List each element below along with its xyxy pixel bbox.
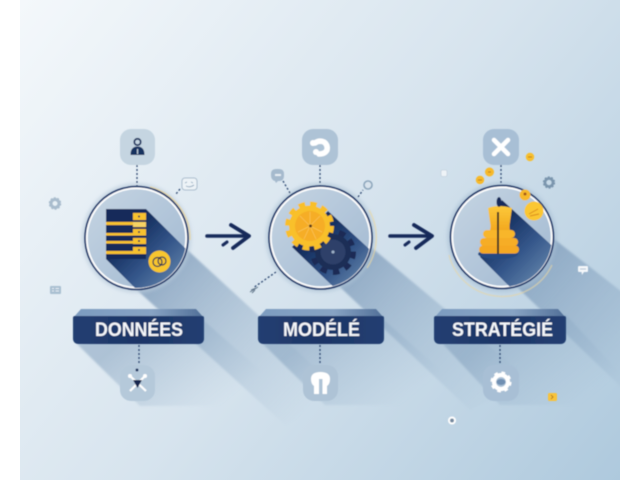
bottom icon: network <box>120 365 155 401</box>
top icon: cloud loop <box>302 129 338 165</box>
icon: gold coin <box>148 250 170 272</box>
icon: dark gear <box>313 232 353 272</box>
icon shadow: server <box>106 208 186 289</box>
top icon: cross <box>483 129 519 165</box>
small icon: pencil <box>250 287 258 293</box>
label: stratégie: STRATÉGIÉ <box>452 319 553 341</box>
panel: données circle <box>80 182 192 294</box>
label: données <box>73 309 204 344</box>
connector lines <box>137 165 501 367</box>
top icon: person <box>120 129 155 165</box>
bottom icon: arch <box>303 365 338 401</box>
small icon: magnifier <box>364 181 372 189</box>
small icon: left gear <box>50 198 60 209</box>
label: données: DONNÉES <box>95 319 183 341</box>
icon: strategy piece <box>478 197 519 259</box>
small icon: white ring <box>449 418 455 424</box>
panel: stratégie circle <box>446 182 557 298</box>
label: stratégie <box>434 309 566 344</box>
icon shadow: gears <box>292 210 370 287</box>
small icon: left card <box>50 286 61 294</box>
small icon: white chat <box>578 266 588 275</box>
icon: gold badge small <box>520 190 530 200</box>
small icon: blue gear <box>544 177 554 188</box>
arrow 2 <box>390 225 432 248</box>
small icon: gold note <box>548 393 557 401</box>
label: modèle: MODÉLÉ <box>283 319 360 341</box>
small icon: smile bubble <box>182 178 197 190</box>
arrow 1 <box>207 225 249 248</box>
icon: gold badge large <box>524 202 544 220</box>
icon: server rack <box>106 209 146 259</box>
small icon: chat bubble grey <box>271 169 284 183</box>
small icons: gold coins <box>476 153 534 184</box>
long shadows <box>77 240 620 406</box>
bottom icon: gear <box>483 365 519 401</box>
icon shadow: chess piece <box>480 200 552 288</box>
icon: gold gear <box>288 204 331 248</box>
small icon: white dot top left <box>441 170 447 176</box>
panel: modèle circle <box>264 182 378 293</box>
label: modèle <box>258 309 384 344</box>
